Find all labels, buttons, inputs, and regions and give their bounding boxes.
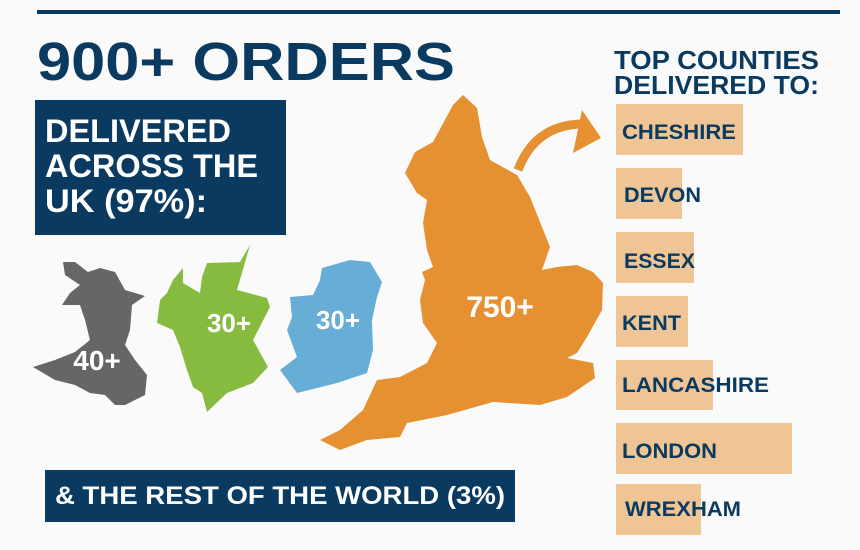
map: scotland: [157, 245, 270, 412]
title: 900+ ORDERS: [37, 32, 455, 92]
map: wales: [33, 262, 147, 405]
bar chart: counties: ESSEX: [624, 250, 695, 273]
bar chart: counties: [616, 104, 792, 535]
panel: rest of the world: [45, 470, 515, 522]
map: wales: 40+: [73, 345, 121, 376]
panel: rest of the world: & THE REST OF THE WORLD (3%): [55, 482, 505, 510]
map: scotland: 30+: [207, 308, 251, 338]
bar chart: counties: WREXHAM: [625, 498, 741, 521]
panel: delivered across the UK: ACROSS THE: [45, 148, 258, 184]
map: england: 750+: [466, 291, 534, 324]
heading: top counties: DELIVERED TO:: [614, 70, 819, 100]
bar chart: counties: LONDON: [622, 440, 717, 463]
heading: top counties: TOP COUNTIES: [614, 45, 819, 75]
map: england: [320, 95, 603, 450]
bar chart: counties: DEVON: [624, 184, 701, 207]
panel: delivered across the UK: [35, 100, 286, 235]
map: ireland: 30+: [316, 305, 360, 335]
bar chart: counties: KENT: [622, 312, 681, 335]
panel: delivered across the UK: UK (97%):: [45, 183, 207, 219]
map: ireland: [280, 260, 382, 393]
heading: top counties: [614, 45, 819, 100]
bar chart: counties: CHESHIRE: [622, 121, 736, 144]
arrow: [518, 110, 601, 170]
bar chart: counties: LANCASHIRE: [622, 374, 769, 397]
panel: delivered across the UK: DELIVERED: [45, 113, 231, 149]
